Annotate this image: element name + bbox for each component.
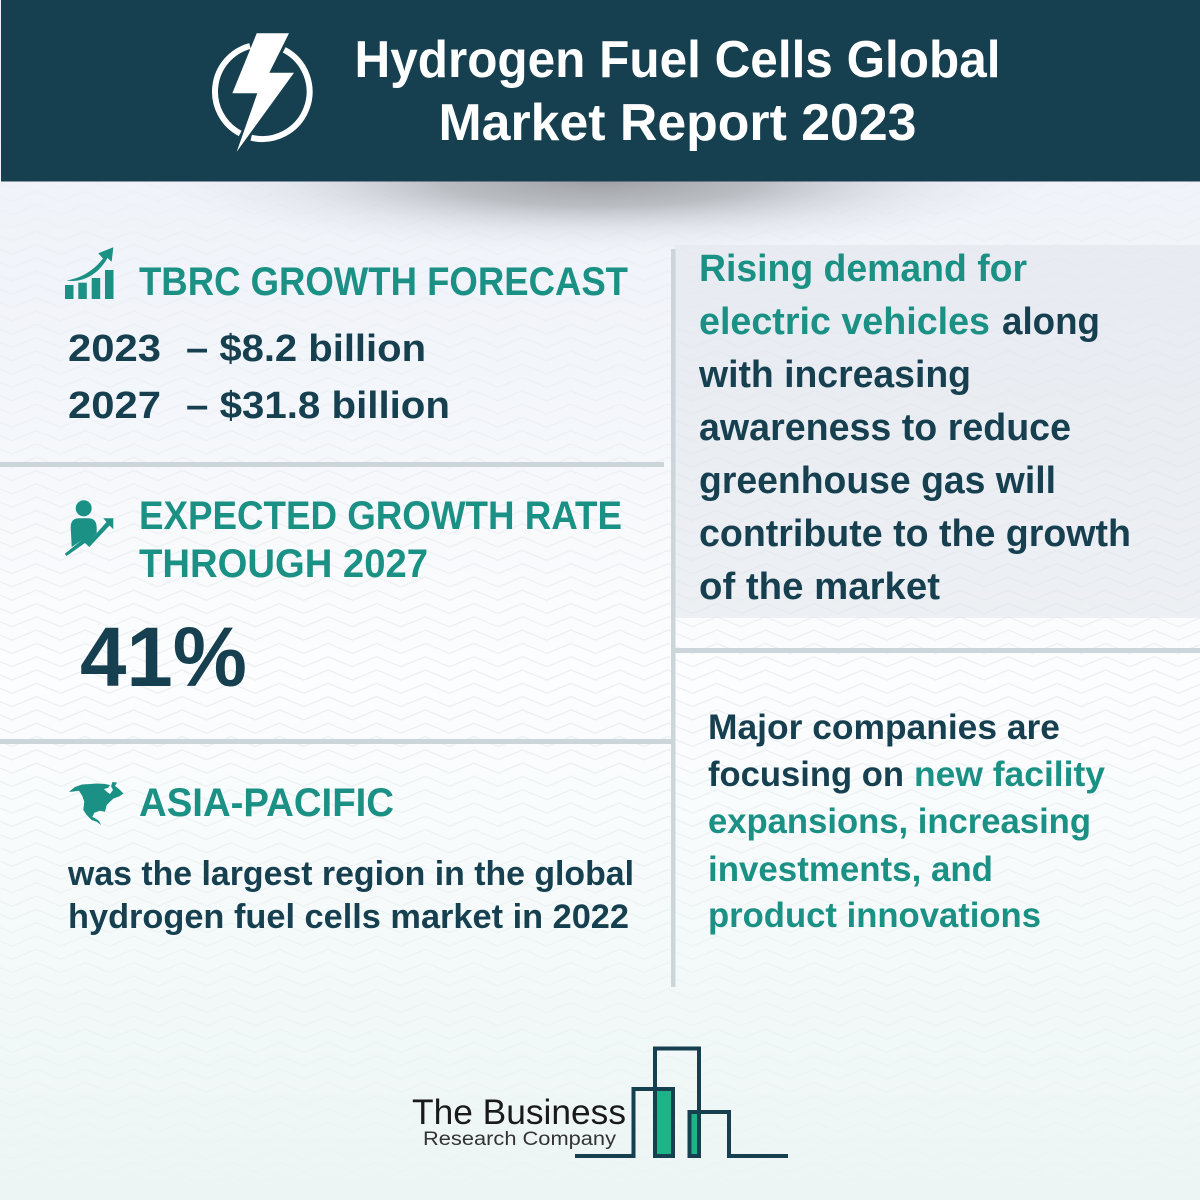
panel: expected growth rate: [65, 494, 622, 704]
description: [67, 855, 634, 936]
panel: Asia-Pacific: [67, 781, 634, 936]
logo: The Business Research Company: [412, 1048, 788, 1156]
forecast values: 2023: [68, 328, 161, 370]
heading: Asia-Pacific: ASIA-PACIFIC: [139, 781, 394, 825]
logo text: The Business: [412, 1093, 626, 1132]
logo text: [412, 1093, 626, 1150]
icon: map of North America: [69, 782, 124, 825]
heading: expected growth rate: EXPECTED GROWTH RATE: [139, 494, 622, 538]
description: hydrogen fuel cells market in 2022: [68, 898, 629, 936]
header banner: [1, 0, 1200, 182]
text block: major companies: expansions, increasing: [708, 802, 1091, 841]
text block: rising demand: along: [1002, 301, 1100, 343]
text block: major companies: [708, 708, 1106, 935]
text block: major companies: focusing on: [708, 755, 904, 794]
text block: rising demand: contribute to the growth: [699, 513, 1131, 555]
icon: person with rising arrow: [65, 500, 113, 556]
text block: rising demand: with increasing: [698, 354, 971, 396]
text block: rising demand: [698, 248, 1131, 608]
title: [354, 31, 1000, 152]
title: Hydrogen Fuel Cells Global: [354, 31, 1000, 89]
panel: rising demand background: [675, 245, 1200, 618]
text block: major companies: product innovations: [708, 896, 1041, 935]
text block: major companies: Major companies are: [708, 708, 1060, 747]
logo text: Research Company: [423, 1129, 617, 1150]
heading: expected growth rate: [139, 494, 622, 586]
text block: rising demand: of the market: [699, 566, 940, 608]
heading: TBRC growth forecast: TBRC GROWTH FORECAST: [139, 260, 628, 304]
forecast values: – $31.8 billion: [186, 385, 450, 427]
description: was the largest region in the global: [67, 855, 634, 893]
forecast values: – $8.2 billion: [186, 328, 426, 370]
text block: major companies: investments, and: [708, 850, 993, 889]
forecast values: [68, 328, 450, 427]
text block: rising demand: electric vehicles: [699, 301, 990, 343]
forecast values: 2027: [68, 385, 161, 427]
icon: lightning bolt in circle: [215, 33, 310, 152]
icon: rising bar chart: [65, 247, 114, 299]
stat: 41%: 41%: [80, 610, 247, 704]
panel: TBRC growth forecast: [65, 247, 628, 427]
text block: rising demand: Rising demand for: [699, 248, 1027, 290]
text block: major companies: new facility: [914, 755, 1106, 794]
text block: rising demand: awareness to reduce: [699, 407, 1071, 449]
title: Market Report 2023: [438, 94, 916, 152]
header shadow: [140, 181, 1060, 256]
logo mark: buildings: [575, 1048, 788, 1156]
text block: rising demand: greenhouse gas will: [699, 460, 1056, 502]
heading: expected growth rate: THROUGH 2027: [139, 542, 428, 586]
